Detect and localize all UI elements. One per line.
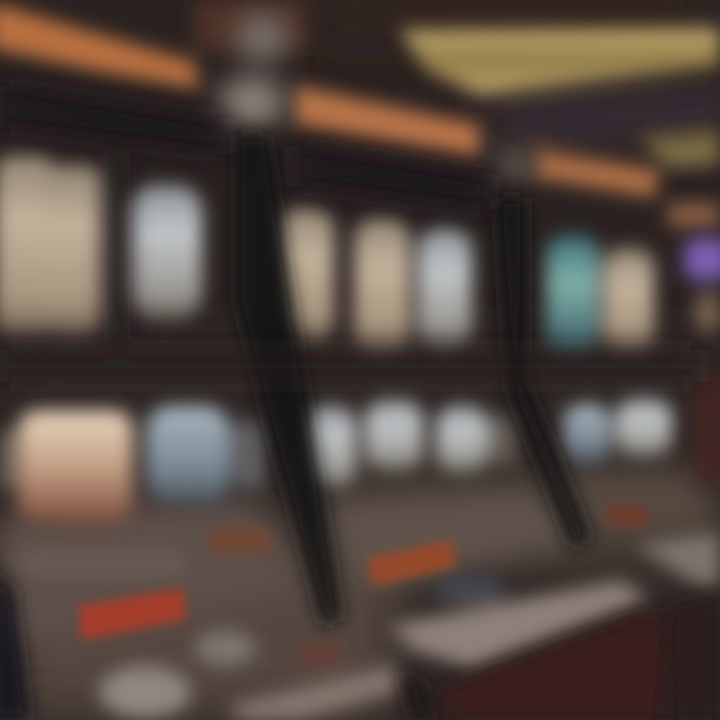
- button panel: right red: [606, 506, 648, 526]
- screen: centre reels: [276, 208, 334, 343]
- button panel: left upper: [208, 528, 272, 554]
- ceiling beam: left orange: [0, 2, 200, 90]
- screen dividers: [0, 85, 700, 382]
- right warm wall: [668, 203, 720, 227]
- right purple light: [684, 238, 720, 280]
- pillar: centre right: [496, 198, 592, 550]
- ceiling beam: centre orange: [295, 85, 480, 158]
- console: bottom left: [230, 665, 402, 720]
- ceiling band: dark purple: [510, 92, 720, 140]
- lower screens: [0, 396, 672, 522]
- lower screen: right row: [563, 403, 611, 465]
- screen: right coloured: [546, 236, 600, 352]
- lamp on pillar: [218, 14, 537, 179]
- cabinet: right maroon: [670, 595, 720, 720]
- ceiling light: lower yellow strip: [640, 132, 720, 168]
- ceiling wood: [195, 0, 305, 50]
- lower screen: centre row: [302, 405, 356, 489]
- console: left buttons: [99, 666, 191, 718]
- lower screen: left blue: [146, 405, 230, 505]
- console: centre light: [390, 580, 650, 668]
- ceiling light: yellow strip: [400, 28, 720, 95]
- button panel: orange centre: [368, 540, 456, 586]
- upper screens: [0, 155, 720, 353]
- right wall maroon: [696, 375, 720, 480]
- console: right: [636, 532, 720, 588]
- screen: left big: [0, 155, 55, 335]
- pillar: bottom centre: [398, 668, 436, 720]
- pillar: centre left: [236, 135, 342, 626]
- ceiling beam: right orange: [535, 150, 660, 198]
- dark pillars: [0, 135, 592, 720]
- consoles: [20, 532, 720, 720]
- cabinet fronts: [440, 375, 720, 720]
- lower panel base: [0, 475, 720, 640]
- ceiling: [0, 0, 720, 227]
- lower screen: left glowing: [18, 410, 133, 522]
- orange accents: [78, 506, 648, 640]
- button panel: red left: [78, 588, 186, 640]
- cabinet: centre maroon: [440, 612, 665, 720]
- pillar: far left bottom: [0, 565, 30, 720]
- screen: left second: [128, 185, 202, 320]
